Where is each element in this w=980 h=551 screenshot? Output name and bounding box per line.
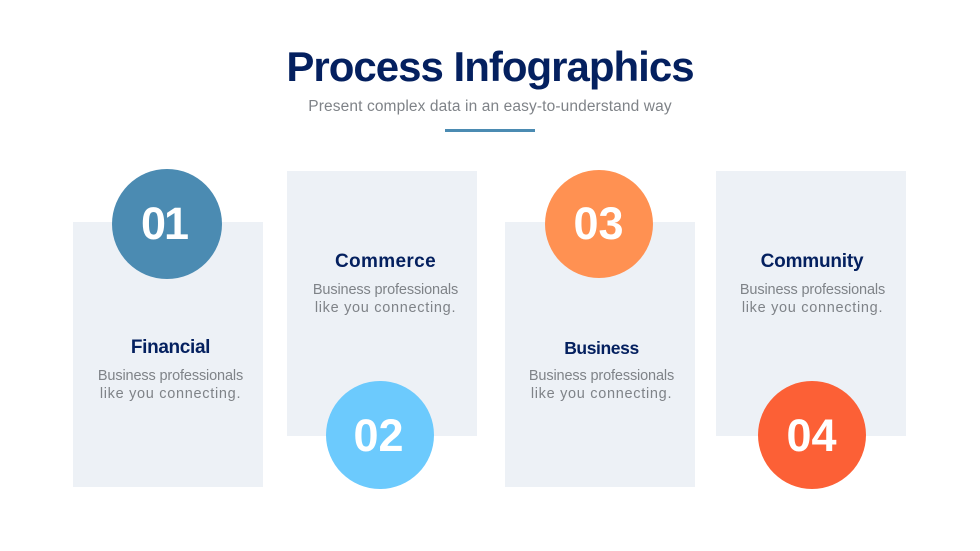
text: community: Business professionals [740,282,885,298]
text: financial: Business professionals [98,368,243,384]
text: commerce: Business professionals [313,282,458,298]
number circle 03 [545,170,653,278]
panel: commerce [287,171,477,436]
heading: business: Business [564,338,639,358]
text: business: like you connecting. [531,386,672,402]
subtitle: Present complex data in an easy-to-understand way [308,98,672,115]
number circle 03: 03 [573,198,624,249]
number circle 04 [758,381,866,489]
panel: community [716,171,906,436]
panel: financial [73,222,263,487]
text: financial [98,368,243,402]
text: financial: like you connecting. [100,386,241,402]
number circle 01 [112,169,222,279]
number circle 04: 04 [786,410,837,461]
number circle 02: 02 [353,410,404,461]
panel: business [505,222,695,487]
title underline [445,129,535,132]
heading: community: Community [761,251,863,272]
number circle 01: 01 [141,198,187,249]
text: community [740,282,885,316]
text: commerce [313,282,458,316]
number circle 02 [326,381,434,489]
title: Process Infographics [286,43,694,90]
text: community: like you connecting. [742,300,883,316]
text: commerce: like you connecting. [315,300,456,316]
text: business [529,368,674,402]
text: business: Business professionals [529,368,674,384]
heading: financial: Financial [131,337,210,358]
heading: commerce: Commerce [335,251,436,272]
